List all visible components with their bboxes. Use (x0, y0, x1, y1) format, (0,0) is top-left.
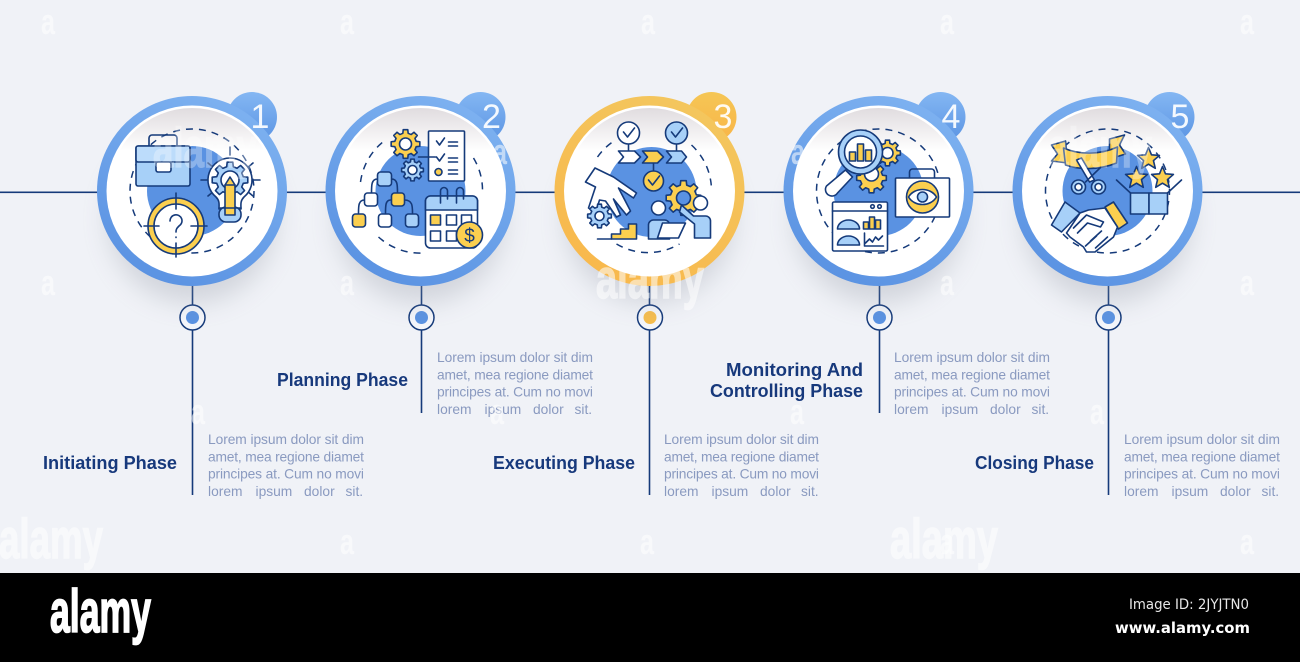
watermarks: a (641, 1, 656, 42)
watermarks: a (340, 521, 355, 562)
heading 4 (710, 360, 863, 401)
text block 3 (664, 432, 819, 499)
step 4: monitoring and controlling phase (710, 92, 1050, 417)
connector and node 5 (1096, 280, 1121, 495)
badge circle 4: 4 (942, 98, 960, 136)
watermarks: alamy (0, 507, 103, 570)
text block 4 (894, 350, 1050, 417)
watermarks: a (490, 391, 505, 432)
icon: checklist (418, 131, 464, 181)
text block 1 (208, 432, 364, 499)
watermarks: a (41, 1, 56, 42)
text block 5: dolor (1220, 484, 1251, 499)
text block 1: dolor (304, 484, 335, 499)
text block 5 (1124, 432, 1280, 499)
watermarks: a (940, 521, 955, 562)
step 1: initiating phase (43, 92, 364, 499)
icon: gears (391, 130, 423, 181)
text block 3: dolor (760, 484, 791, 499)
watermarks: alamy (1048, 116, 1152, 179)
badge circle 5 (1012, 92, 1202, 303)
watermarks: alamy (890, 507, 998, 570)
text block 1: amet, mea regione diamet (208, 449, 364, 464)
text block 2: lorem (437, 402, 472, 417)
connector and node 2 (409, 280, 434, 413)
icon: people at laptop with gear (648, 181, 710, 239)
heading 4: Monitoring And (726, 360, 863, 380)
connector and node 1 (180, 280, 205, 495)
text block 4: ipsum (942, 402, 978, 417)
icon: magnifying glass with bars (825, 130, 882, 196)
step 2: planning phase (277, 92, 593, 417)
icon: gears (857, 140, 900, 193)
text block 2: principes at. Cum no movi (437, 385, 593, 400)
text block 2: amet, mea regione diamet (437, 367, 593, 382)
text block 2: dolor (533, 402, 564, 417)
horizontal timeline line (0, 192, 1300, 193)
text block 5: principes at. Cum no movi (1124, 467, 1280, 482)
text block 1: principes at. Cum no movi (208, 467, 364, 482)
text block 4: amet, mea regione diamet (894, 367, 1050, 382)
text block 3: amet, mea regione diamet (664, 449, 819, 464)
icon: stairs (598, 224, 636, 239)
icon: analytics dashboard (832, 202, 888, 251)
text block 4: lorem (894, 402, 928, 417)
watermarks: a (940, 1, 955, 42)
heading 2: Planning Phase (277, 370, 408, 390)
text block 2: sit. (574, 402, 592, 417)
heading 4: Controlling Phase (710, 381, 863, 401)
connector and node 4 (867, 280, 892, 413)
badge circle 5: 5 (1171, 98, 1189, 136)
step 3: executing phase (493, 92, 819, 499)
footer logo: alamy (50, 578, 151, 645)
icon: calendar with dollar coin: $ (464, 226, 475, 247)
text block 3: sit. (801, 484, 819, 499)
text block 2: Lorem ipsum dolor sit dim (437, 350, 593, 365)
watermarks: a (640, 521, 655, 562)
image id: Image ID: 2JYJTN0 (1129, 597, 1249, 613)
icon: hand placing gear (586, 168, 636, 228)
heading 3: Executing Phase (493, 453, 635, 473)
watermarks: a (340, 1, 355, 42)
text block 5: amet, mea regione diamet (1124, 449, 1280, 464)
text block 2 (437, 350, 593, 417)
badge circle 4 (784, 92, 974, 303)
badge circle 2: 2 (482, 98, 501, 136)
icon: handshake (1052, 202, 1128, 252)
text block 5: lorem (1124, 484, 1158, 499)
watermarks: a (1240, 1, 1255, 42)
text block 3: Lorem ipsum dolor sit dim (664, 432, 819, 447)
icon: light bulb with gear and pencil (201, 147, 260, 222)
website: www.alamy.com (1115, 619, 1250, 637)
watermarks: a (1240, 521, 1255, 562)
text block 3: principes at. Cum no movi (664, 467, 819, 482)
text block 3: ipsum (712, 484, 748, 499)
badge circle 3: 3 (714, 98, 732, 136)
text block 3: lorem (664, 484, 698, 499)
heading 1: Initiating Phase (43, 453, 177, 473)
text block 4: dolor (990, 402, 1021, 417)
icon: scissors (1072, 158, 1106, 194)
icon: target with question mark (144, 193, 207, 257)
badge circle 2 (326, 92, 516, 303)
text block 5: Lorem ipsum dolor sit dim (1124, 432, 1280, 447)
watermarks: a (191, 391, 206, 432)
icon: ribbon (1052, 135, 1126, 169)
text block 5: sit. (1262, 484, 1279, 499)
watermarks: a (493, 131, 508, 172)
watermarks: a (41, 262, 56, 303)
text block 4: sit. (1032, 402, 1049, 417)
watermarks: a (1090, 391, 1105, 432)
icon: stars and open box (1116, 148, 1182, 214)
text block 1: sit. (346, 484, 363, 499)
badge circle 1 (97, 92, 287, 303)
footer bar (0, 573, 1300, 662)
text block 4: principes at. Cum no movi (894, 385, 1050, 400)
badge circle 3 (554, 92, 744, 303)
icon: briefcase with eye (896, 169, 950, 217)
heading 5: Closing Phase (975, 453, 1094, 473)
icon: briefcase (136, 135, 190, 186)
watermarks: alamy (596, 247, 704, 310)
watermarks: a (340, 262, 355, 303)
icon: organisation chart (352, 172, 418, 227)
watermarks: a (1240, 262, 1255, 303)
icon: calendar with dollar coin (426, 188, 482, 248)
text block 5: ipsum (1172, 484, 1208, 499)
text block 1: lorem (208, 484, 242, 499)
watermarks: a (791, 131, 806, 172)
text block 1: Lorem ipsum dolor sit dim (208, 432, 364, 447)
watermarks: alamy (153, 116, 257, 179)
badge circle 1: 1 (251, 98, 269, 136)
text block 4: Lorem ipsum dolor sit dim (894, 350, 1050, 365)
watermarks: a (940, 262, 955, 303)
text block 2: ipsum (484, 402, 521, 417)
connector and node 3 (638, 280, 662, 495)
icon: process chevrons with check marks (618, 122, 688, 191)
text block 1: ipsum (256, 484, 292, 499)
watermarks: a (790, 391, 805, 432)
step 5: closing phase (975, 92, 1280, 499)
